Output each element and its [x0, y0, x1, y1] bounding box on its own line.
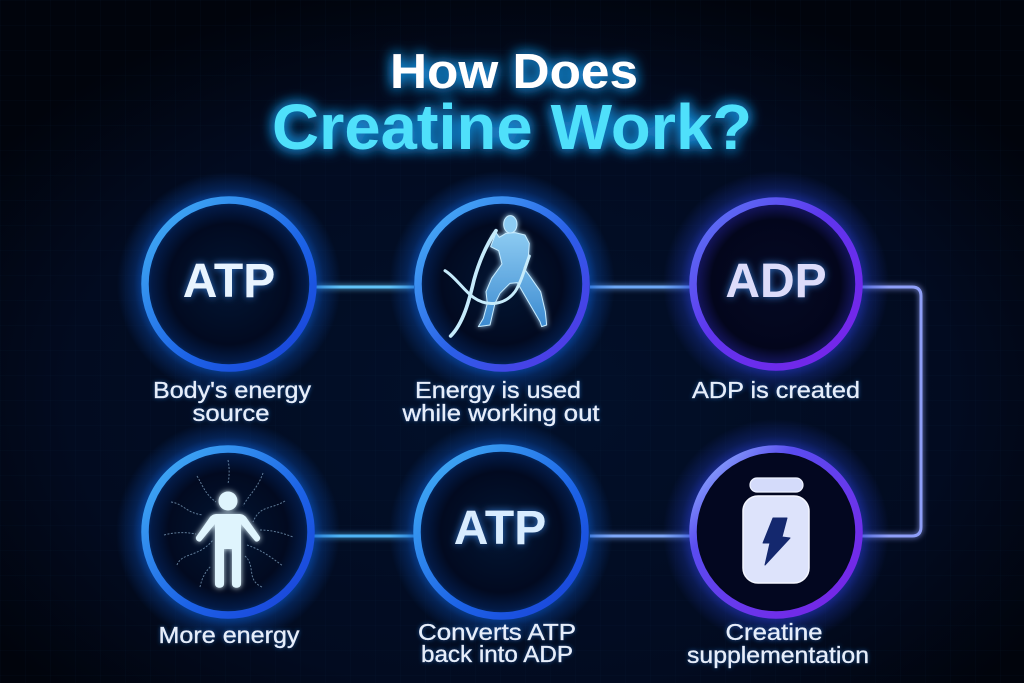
caption: source — [192, 400, 270, 426]
ring — [663, 419, 889, 645]
icon: glowing person with energy lines — [164, 460, 293, 588]
caption: Energy is used — [415, 377, 581, 403]
ring — [116, 420, 340, 644]
ring — [389, 171, 615, 397]
connector: ATP to energy use — [316, 286, 414, 288]
connector: energy use to ADP — [590, 286, 690, 288]
label: ATP: ATP — [454, 502, 546, 555]
caption: Body's energy — [153, 377, 312, 403]
caption: Converts ATP — [418, 619, 576, 645]
connector: ATP to more energy — [314, 534, 414, 538]
title line: Creatine Work?: Creatine Work? — [272, 91, 752, 163]
caption: Creatine — [726, 619, 822, 645]
ring — [389, 420, 613, 644]
title line: How Does: How Does — [390, 45, 638, 99]
ring — [663, 171, 889, 397]
caption: ADP is created — [692, 377, 860, 403]
node: more energy — [116, 420, 340, 648]
node: creatine supplementation — [663, 419, 889, 668]
caption — [418, 619, 576, 667]
caption — [687, 619, 869, 668]
caption: supplementation — [687, 642, 869, 668]
connector: ADP to creatine supplementation — [862, 287, 921, 536]
caption: while working out — [401, 400, 600, 426]
connector: creatine to ATP — [590, 534, 690, 538]
label: ADP: ADP — [725, 255, 827, 308]
caption — [401, 377, 600, 426]
caption — [153, 377, 312, 426]
icon: athlete with battle ropes — [445, 216, 547, 336]
node: ADP created — [663, 171, 889, 403]
node: ATP energy source — [117, 172, 341, 426]
caption: More energy — [158, 622, 300, 648]
caption: back into ADP — [421, 641, 573, 667]
label: ATP: ATP — [183, 255, 275, 308]
title — [272, 45, 752, 163]
icon: supplement jar with bolt — [743, 478, 809, 583]
node: energy used while working out — [389, 171, 615, 426]
node: ATP converts — [389, 420, 613, 667]
ring — [117, 172, 341, 396]
